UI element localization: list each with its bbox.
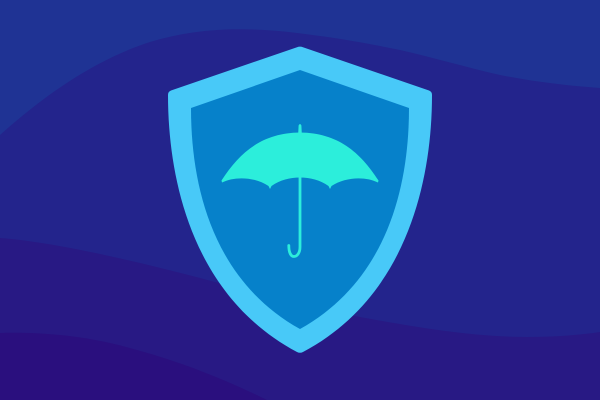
shield: outer border [168, 47, 432, 353]
background: bottom wave layer [0, 333, 267, 400]
background: third wave layer [0, 238, 600, 400]
icon: umbrella [222, 124, 378, 256]
shield: inner panel [191, 70, 409, 329]
umbrella: tip [298, 124, 302, 134]
umbrella: canopy [222, 132, 378, 189]
shield [168, 47, 432, 353]
umbrella: shaft and handle [289, 177, 300, 256]
